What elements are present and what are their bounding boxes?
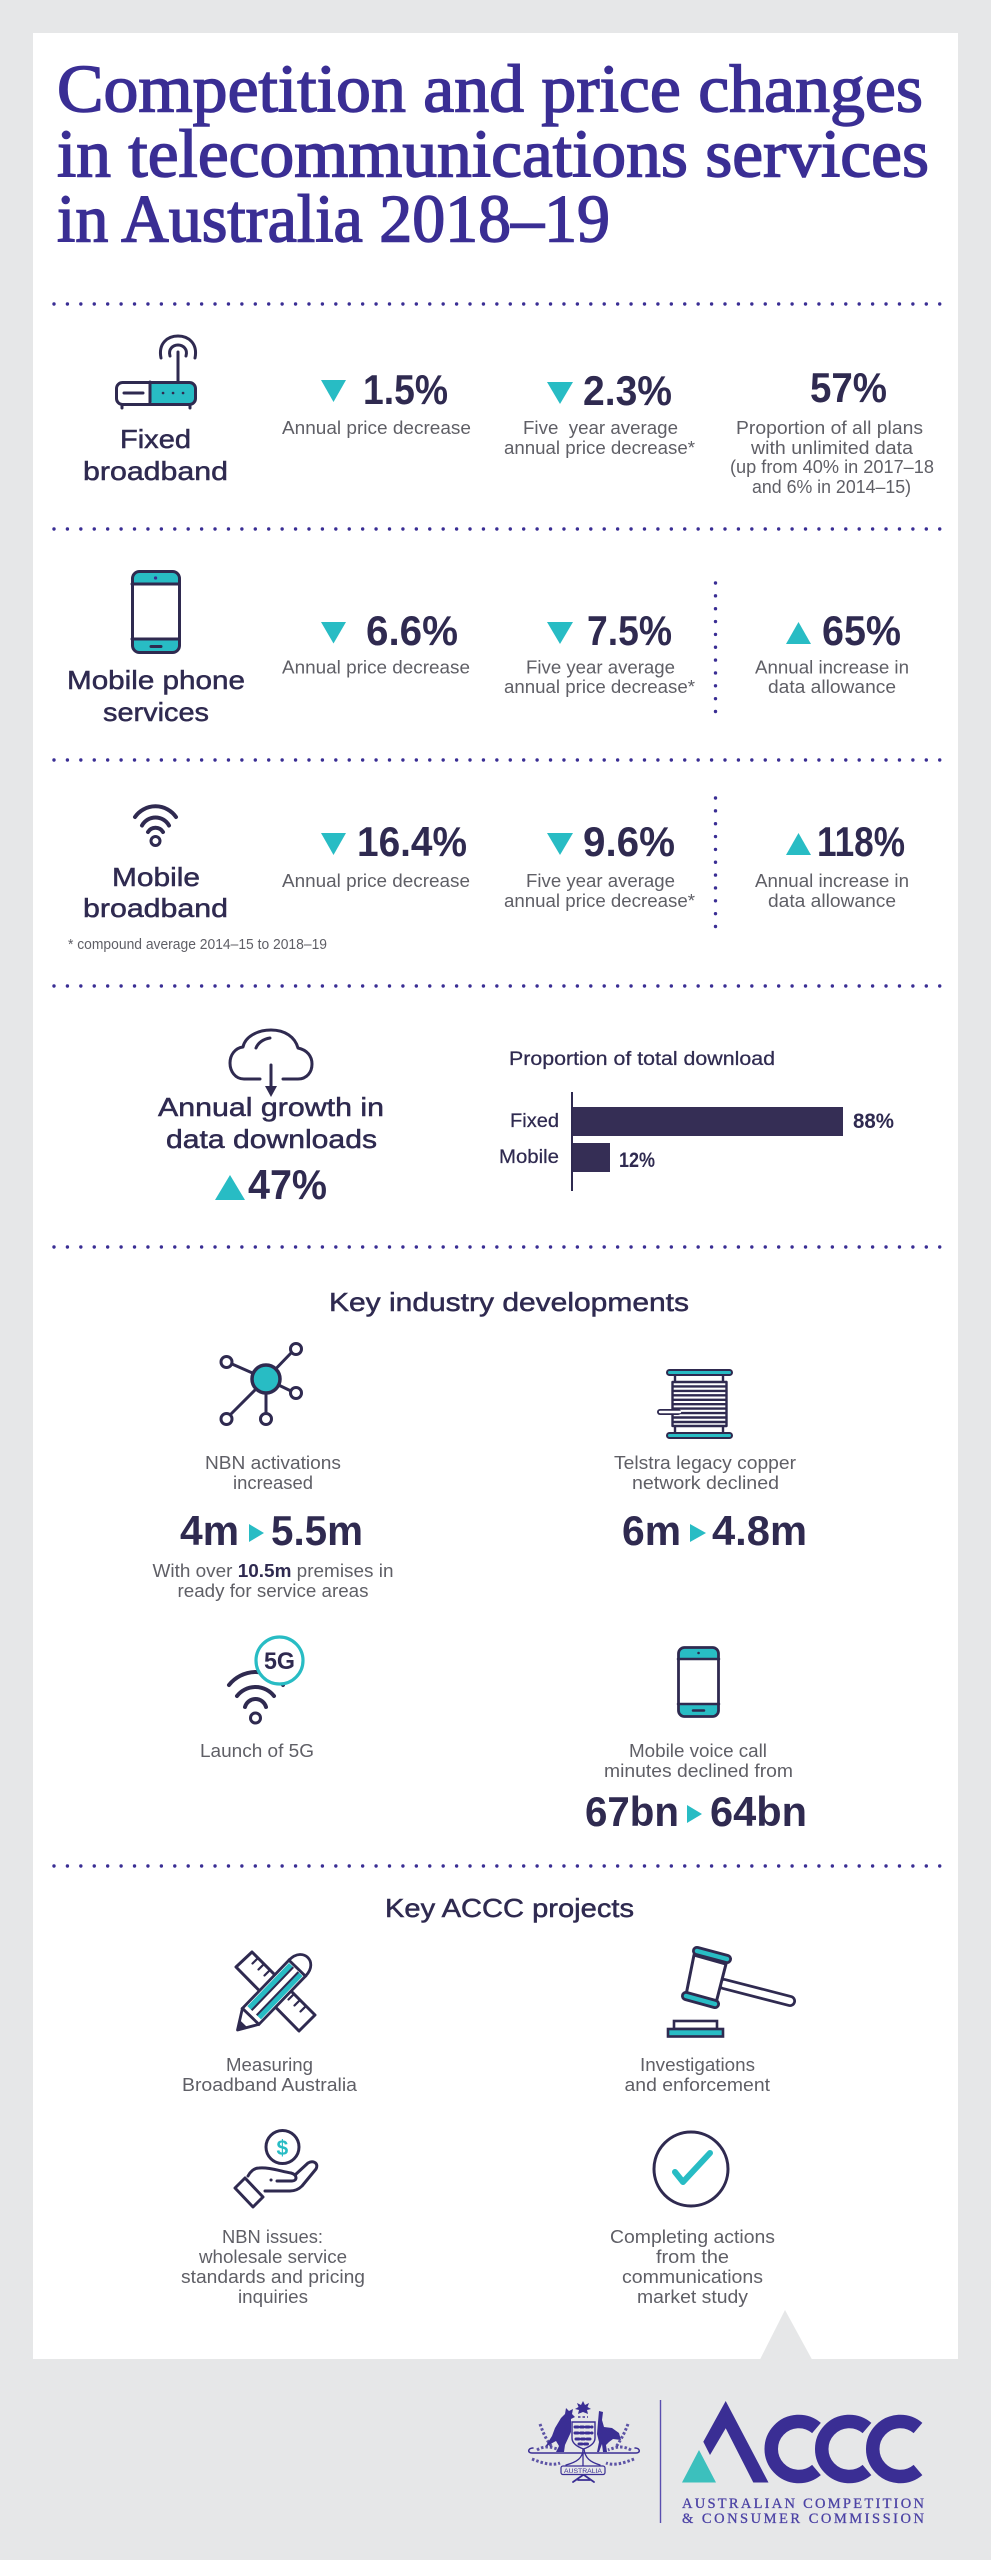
label: fixed broadband: Fixed <box>120 424 191 454</box>
panel: launch of 5G <box>200 1637 314 1761</box>
stat: annual price decrease 16.4%: 16.4% <box>357 818 467 865</box>
panel: completing actions <box>610 2132 775 2307</box>
logo: ACCC <box>682 2401 925 2527</box>
stat: annual price decrease 6.6%: 6.6% <box>366 607 458 654</box>
stat: annual price decrease 16.4% <box>282 818 470 891</box>
icon: smartphone <box>678 1648 719 1716</box>
bar chart: proportion of total download: Mobile <box>499 1147 559 1168</box>
stat: growth 47% <box>215 1161 327 1208</box>
icon: cloud download <box>230 1030 312 1097</box>
grey triangle notch <box>760 2310 812 2360</box>
stat: 67bn to 64bn <box>585 1788 807 1835</box>
text: mobile voice call minutes: minutes declined from <box>604 1760 793 1781</box>
stat: five year average 2.3%: Five year average <box>523 417 678 438</box>
label: fixed broadband <box>83 424 228 486</box>
stat: unlimited data plans 57%: with unlimited data <box>750 437 914 458</box>
panel: mobile voice call minutes <box>585 1648 807 1835</box>
text: NBN issues: wholesale service <box>198 2246 347 2267</box>
stat: data allowance 118%: Annual increase in <box>755 870 909 891</box>
footnote: * compound average 2014–15 to 2018–19 <box>68 937 327 953</box>
stat: five year average 7.5%: annual price decrease* <box>504 676 695 697</box>
text: ready for service premises: ready for service areas <box>178 1580 368 1601</box>
text: Telstra legacy copper network declined <box>614 1452 796 1493</box>
stat: five year average 9.6%: Five year average <box>526 870 675 891</box>
bar chart: proportion of total download: Fixed <box>510 1111 559 1132</box>
heading: annual growth in data downloads: data downloads <box>166 1124 377 1154</box>
text: mobile voice call minutes: Mobile voice call <box>629 1740 767 1761</box>
text: ready for service premises: With over 10.5m premises in <box>152 1560 394 1581</box>
text: completing actions: from the <box>656 2246 729 2267</box>
stat: data allowance 118%: 118% <box>817 818 905 865</box>
stat: five year average 7.5%: Five year average <box>526 656 675 678</box>
stat: five year average 7.5% <box>504 607 695 697</box>
label: mobile phone services: Mobile phone <box>67 665 245 695</box>
icon: ruler and pencil <box>229 1949 316 2038</box>
panel: investigations and enforcement <box>624 1951 790 2095</box>
label: mobile phone services <box>67 665 245 727</box>
stat: data allowance 118% <box>755 818 909 911</box>
panel: NBN activations <box>152 1344 394 1601</box>
heading: annual growth in data downloads <box>158 1092 384 1154</box>
panel: mobile phone services <box>67 572 909 727</box>
stat: 6m to 4.8m <box>622 1507 807 1554</box>
label: mobile broadband: broadband <box>83 893 228 923</box>
stat: annual price decrease 1.5% <box>282 366 471 438</box>
stat: annual price decrease 6.6% <box>282 607 470 678</box>
stat: five year average 7.5%: 7.5% <box>587 607 672 654</box>
title <box>57 50 929 256</box>
stat: unlimited data plans 57% <box>730 364 934 497</box>
stat: five year average 9.6%: annual price decrease* <box>504 890 695 911</box>
stat: five year average 2.3%: annual price decrease* <box>504 437 695 458</box>
heading: key ACCC projects: Key ACCC projects <box>385 1893 634 1923</box>
text: investigations and enforcement: and enforcement <box>624 2074 770 2095</box>
title: in Australia 2018–19 <box>57 180 610 256</box>
text: completing actions <box>610 2226 775 2307</box>
stat: unlimited data plans 57%: and 6% in 2014–15) <box>752 476 911 497</box>
stat: 6m to 4.8m: 4.8m <box>712 1507 807 1554</box>
title: in telecommunications services <box>57 116 929 192</box>
panel: measuring broadband <box>182 1949 358 2095</box>
logo: ACCC: AUSTRALIAN COMPETITION <box>682 2496 925 2512</box>
logo: commonwealth coat of arms <box>529 2401 639 2482</box>
stat: five year average 9.6% <box>504 818 695 911</box>
icon: hand with coin: $ <box>276 2137 288 2160</box>
bar chart: proportion of total download: Proportion of total download <box>509 1049 775 1070</box>
stat: 4m to 5.5m: 5.5m <box>271 1507 363 1554</box>
stat: data allowance 65%: 65% <box>822 607 901 654</box>
stat: annual price decrease 1.5%: 1.5% <box>363 366 448 413</box>
panel: fixed broadband <box>83 336 934 497</box>
icon: 5G wifi: 5G <box>264 1648 295 1675</box>
text: Telstra legacy copper network declined: network declined <box>632 1472 779 1493</box>
text: investigations and enforcement: Investigations <box>640 2054 755 2075</box>
icon: check circle <box>654 2132 728 2206</box>
icon: router <box>116 336 196 408</box>
label: mobile broadband: Mobile <box>112 862 200 892</box>
text: ready for service premises <box>152 1560 394 1601</box>
icon: gavel <box>668 1951 790 2036</box>
stat: five year average 2.3%: 2.3% <box>583 367 672 414</box>
stat: unlimited data plans 57%: 57% <box>810 364 887 411</box>
stat: 67bn to 64bn: 64bn <box>710 1788 807 1835</box>
stat: 6m to 4.8m: 6m <box>622 1507 681 1554</box>
icon: smartphone <box>132 572 180 652</box>
stat: data allowance 65%: data allowance <box>768 676 896 697</box>
bar chart: proportion of total download: 12% <box>619 1149 655 1172</box>
text: NBN activations increased: NBN activations <box>205 1452 341 1473</box>
heading: key industry developments: Key industry developments <box>329 1287 689 1317</box>
stat: 4m to 5.5m: 4m <box>180 1507 239 1554</box>
stat: five year average 2.3% <box>504 367 695 458</box>
stat: 4m to 5.5m <box>180 1507 363 1554</box>
stat: annual price decrease 16.4%: Annual price decrease <box>282 870 470 891</box>
text: completing actions: market study <box>637 2286 749 2307</box>
bar chart: proportion of total download: 88% <box>853 1110 894 1133</box>
label: mobile phone services: services <box>103 697 209 727</box>
stat: data allowance 118%: data allowance <box>768 890 896 911</box>
stat: 67bn to 64bn: 67bn <box>585 1788 679 1835</box>
text: measuring broadband australia: Broadband Australia <box>182 2074 358 2095</box>
stat: annual price decrease 1.5%: Annual price decrease <box>282 417 471 438</box>
text: NBN issues: inquiries <box>238 2286 308 2307</box>
bar chart: proportion of total download <box>499 1049 894 1191</box>
text: completing actions: Completing actions <box>610 2226 775 2247</box>
icon: wifi <box>135 806 176 846</box>
panel: mobile broadband <box>68 798 909 953</box>
icon: copper spool <box>660 1370 732 1438</box>
text: NBN issues: NBN issues: <box>222 2226 323 2247</box>
stat: annual price decrease 6.6%: Annual price decrease <box>282 656 470 678</box>
text: NBN issues: standards and pricing <box>181 2266 365 2287</box>
icon: network hub <box>221 1344 302 1424</box>
label: fixed broadband: broadband <box>83 456 228 486</box>
panel: NBN issues <box>181 2130 365 2307</box>
heading: annual growth in data downloads: Annual growth in <box>158 1092 384 1122</box>
text: NBN issues <box>181 2226 365 2307</box>
icon: hand with coin <box>235 2130 317 2207</box>
panel: data downloads <box>158 1030 894 1208</box>
stat: data allowance 65%: Annual increase in <box>755 656 909 678</box>
text: completing actions: communications <box>622 2266 763 2287</box>
title: Competition and price changes <box>57 50 923 126</box>
text: mobile voice call minutes <box>604 1740 793 1781</box>
stat: growth 47%: 47% <box>248 1161 327 1208</box>
label: mobile broadband <box>83 862 228 923</box>
stat: five year average 9.6%: 9.6% <box>583 818 675 865</box>
text: NBN activations increased <box>205 1452 341 1493</box>
logo: commonwealth coat of arms: AUSTRALIA <box>564 2468 603 2475</box>
text: launch of 5G: Launch of 5G <box>200 1740 314 1761</box>
panel: Telstra legacy copper <box>614 1370 807 1554</box>
text: Telstra legacy copper network declined: Telstra legacy copper <box>614 1452 796 1473</box>
stat: unlimited data plans 57%: (up from 40% in 2017–18 <box>730 456 934 477</box>
stat: unlimited data plans 57%: Proportion of all plans <box>736 417 923 438</box>
stat: data allowance 65% <box>755 607 909 697</box>
logo: ACCC: & CONSUMER COMMISSION <box>682 2511 925 2527</box>
text: NBN activations increased: increased <box>233 1472 313 1493</box>
text: measuring broadband australia: Measuring <box>226 2054 313 2075</box>
text: measuring broadband australia <box>182 2054 358 2095</box>
text: investigations and enforcement <box>624 2054 770 2095</box>
